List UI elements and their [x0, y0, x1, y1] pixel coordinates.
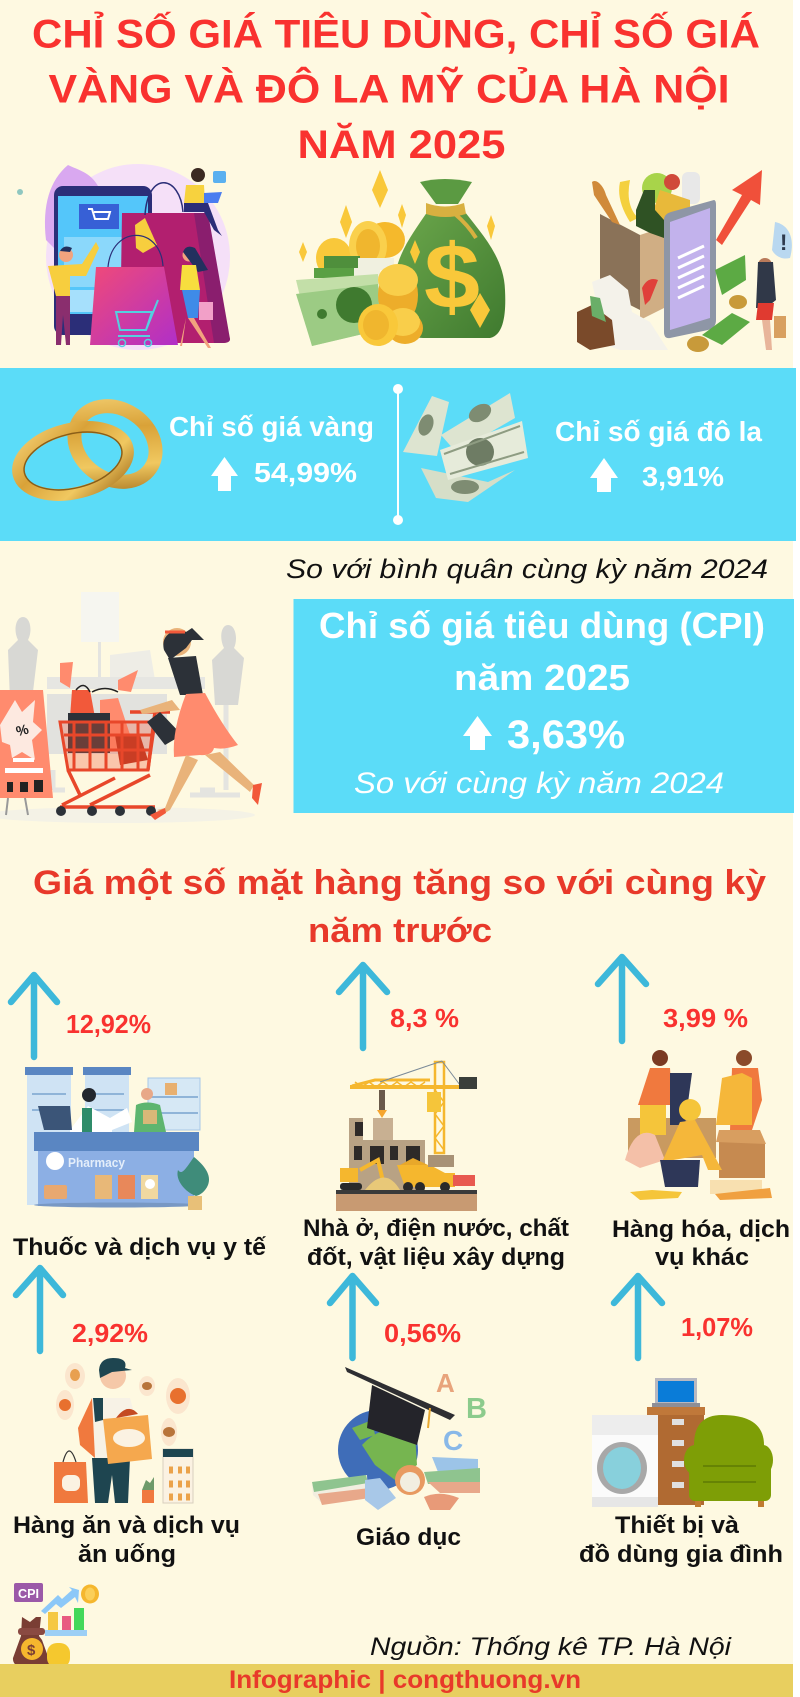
arrow [330, 1276, 376, 1358]
icon: pharmacy: Pharmacy [68, 1155, 126, 1170]
label: CPI heading [319, 605, 765, 698]
icon: pharmacy [25, 1067, 209, 1210]
label: Hàng ăn và dịch vụ [13, 1512, 240, 1539]
value: 1,07% [681, 1312, 753, 1342]
icon: CPI chart and money bag: $ [27, 1642, 36, 1659]
icon: up arrow gold [211, 457, 238, 491]
illustration: groceries and price rise [577, 170, 792, 352]
icon: globe and graduation cap: C [443, 1425, 463, 1456]
label: Hàng hóa, dịch [612, 1216, 790, 1243]
heading: item prices: Giá một số mặt hàng tăng so với cùng kỳ [33, 864, 766, 902]
note: CPI comparison: So với cùng kỳ năm 2024 [354, 767, 724, 800]
icon: clothes and boxes [625, 1050, 772, 1200]
label: Thiết bị và [615, 1512, 740, 1539]
icon: up arrow CPI [463, 716, 492, 750]
icon: up arrow dollar [590, 458, 618, 492]
label: Nhà ở, điện nước, chất [303, 1215, 569, 1242]
footer bar [0, 1664, 793, 1697]
illustration: money bag and coins: $ [424, 226, 480, 328]
label [579, 1512, 783, 1568]
icon: washing machine, cabinet and armchair [592, 1378, 773, 1507]
illustration: money bag and coins [296, 170, 505, 346]
label: đồ dùng gia đình [579, 1541, 783, 1568]
item: household appliances [579, 1276, 783, 1568]
arrow [339, 965, 387, 1048]
icon: globe and graduation cap [312, 1367, 487, 1510]
label: vụ khác [655, 1244, 749, 1271]
arrow [598, 957, 646, 1041]
item: education [312, 1276, 487, 1551]
icon: gold rings [11, 391, 170, 506]
label: CPI heading: năm 2025 [454, 657, 630, 698]
label [13, 1512, 240, 1568]
label: Giáo dục [356, 1524, 461, 1551]
illustration: groceries and price rise: ! [780, 230, 787, 255]
item: other goods and services [598, 957, 790, 1271]
divider [393, 384, 403, 525]
item: food services [13, 1268, 240, 1568]
label: CPI heading: Chỉ số giá tiêu dùng (CPI) [319, 605, 765, 646]
panel: CPI [294, 599, 794, 813]
label [612, 1216, 790, 1271]
source: Nguồn: Thống kê TP. Hà Nội [370, 1633, 733, 1661]
label [303, 1215, 569, 1271]
illustration: woman with shopping cart: % [14, 720, 31, 739]
icon: CPI chart and money bag [13, 1583, 99, 1668]
value: 2,92% [72, 1318, 148, 1348]
value: dollar index: 3,91% [642, 461, 724, 492]
value: gold index: 54,99% [254, 457, 357, 488]
value: 8,3 % [390, 1003, 459, 1033]
title: NĂM 2025 [298, 122, 506, 167]
icon: globe and graduation cap: A [436, 1368, 455, 1398]
value: 12,92% [66, 1009, 151, 1039]
label: ăn uống [78, 1541, 176, 1568]
item: medicine and health [11, 975, 267, 1261]
icon: dollar bills [403, 393, 528, 502]
illustration: woman with shopping cart [0, 592, 262, 823]
arrow [11, 975, 57, 1057]
title: VÀNG VÀ ĐÔ LA MỸ CỦA HÀ NỘI [48, 66, 730, 112]
value: 0,56% [384, 1318, 461, 1348]
icon: globe and graduation cap: B [466, 1393, 487, 1425]
heading: item prices: năm trước [308, 912, 492, 950]
footer bar: Infographic | congthuong.vn [229, 1666, 581, 1694]
title [32, 10, 760, 167]
label: Thuốc và dịch vụ y tế [13, 1234, 267, 1261]
label: dollar index: Chỉ số giá đô la [555, 416, 762, 447]
arrow [16, 1268, 63, 1351]
label: gold index: Chỉ số giá vàng [169, 411, 374, 442]
arrow [614, 1276, 662, 1358]
title: CHỈ SỐ GIÁ TIÊU DÙNG, CHỈ SỐ GIÁ [32, 10, 760, 56]
illustration: online shopping [17, 164, 230, 350]
panel: gold and dollar indices [0, 368, 796, 541]
icon: construction site [336, 1061, 477, 1211]
value: CPI: 3,63% [507, 713, 625, 757]
heading: item prices [33, 864, 766, 950]
value: 3,99 % [663, 1003, 748, 1033]
label: đốt, vật liệu xây dựng [307, 1244, 565, 1271]
icon: CPI chart and money bag: CPI [18, 1586, 39, 1601]
item: housing and utilities [303, 965, 569, 1271]
icon: food delivery man [54, 1358, 193, 1503]
note: comparison period: So với bình quân cùng kỳ năm 2024 [286, 554, 768, 584]
